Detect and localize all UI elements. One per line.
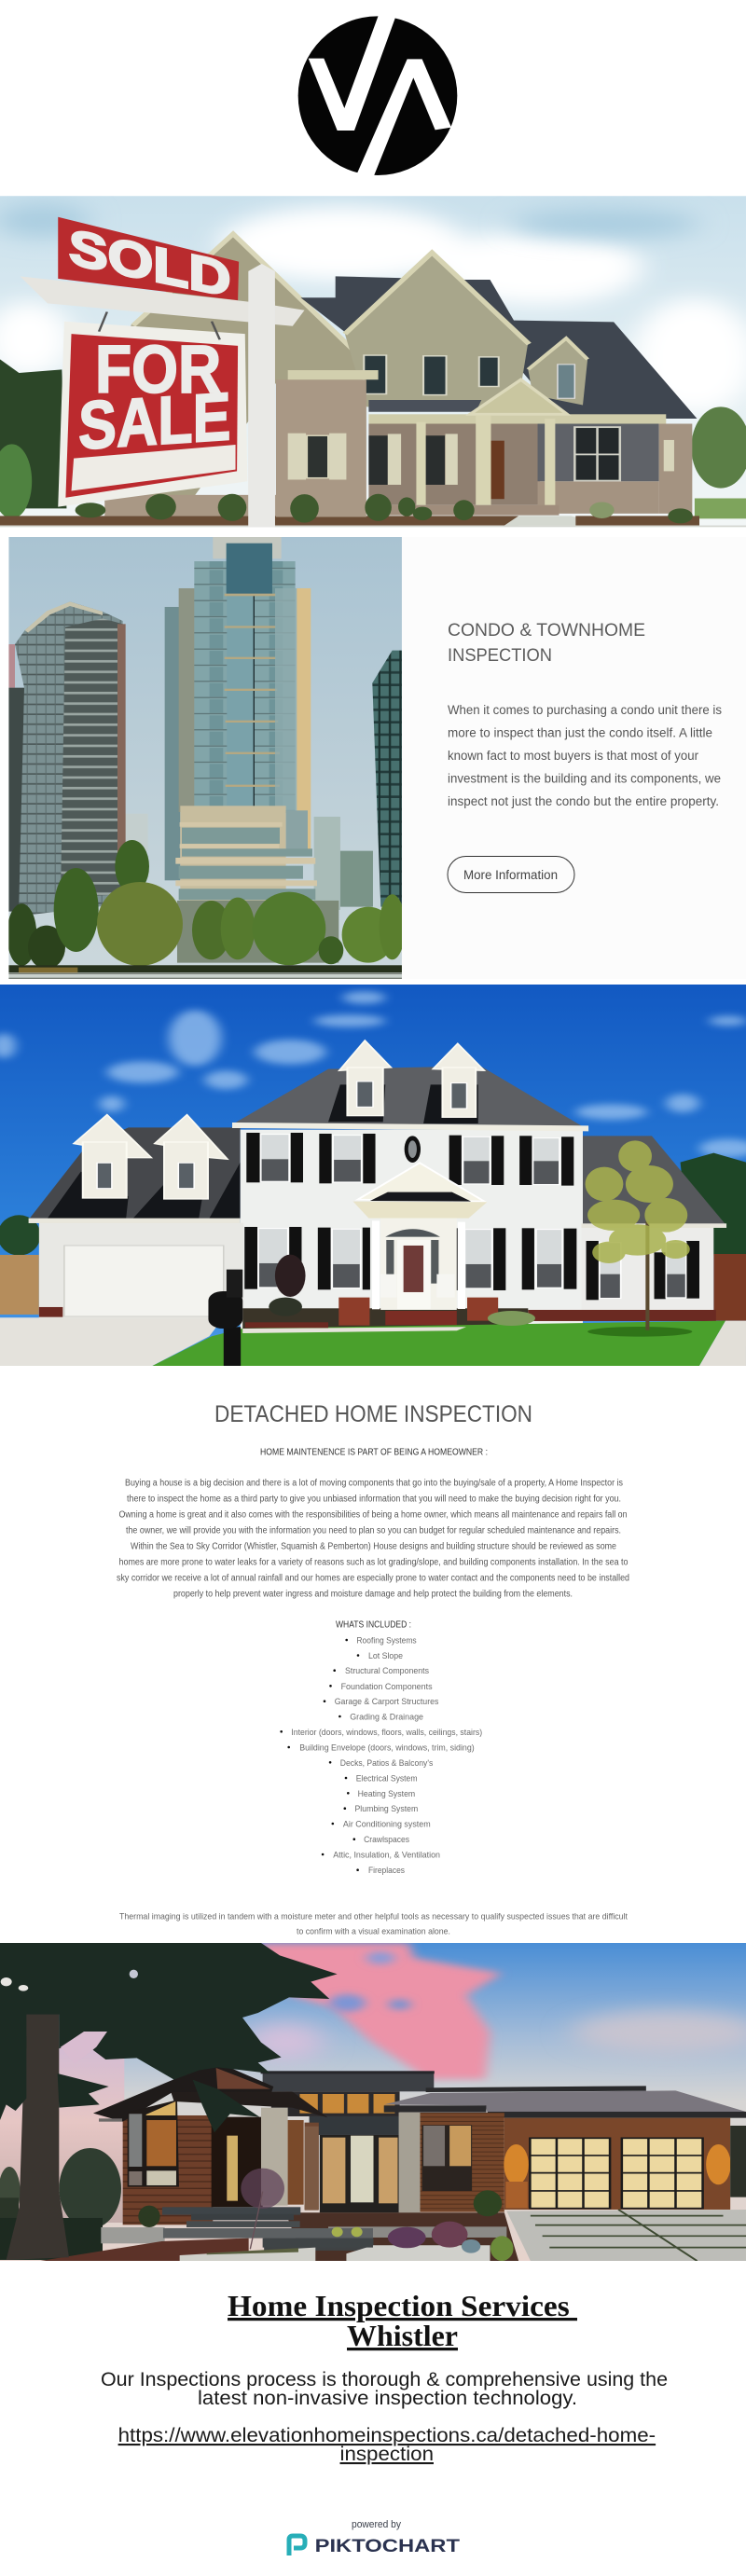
list: whats included items: Grading & Drainage [350,1712,423,1723]
heading: condo and townhome: CONDO & TOWNHOME [448,621,645,641]
text: detached home description: Buying a house is a big decision and there is a lot of moving components that go into the buying/sale of a property, A Home Inspector is [125,1479,623,1488]
list: whats included items: Plumbing System [354,1804,418,1814]
list: whats included items: Garage & Carport Structures [335,1697,439,1707]
heading: detached home inspection: DETACHED HOME INSPECTION [214,1401,532,1427]
photo: house with sold sign [0,196,746,527]
text: condo description: When it comes to purchasing a condo unit there is [448,703,722,717]
text: inspections process: latest non-invasive inspection technology. [198,2388,577,2409]
footer: powered by piktochart: powered by [352,2519,401,2530]
text: condo description: more to inspect than just the condo itself. A little [448,725,712,740]
heading: home inspection services whistler: Home Inspection Services [228,2289,577,2322]
sign: sold and for sale: SOLD [69,219,230,308]
list: whats included items: Interior (doors, windows, floors, walls, ceilings, stairs) [291,1728,482,1738]
text: detached home description: Owning a home is great and it also comes with the responsibilities of being a home owner, which means all maintenance and repairs fall on [119,1510,627,1520]
photo: condo towers [7,537,406,979]
link: website url: https://www.elevationhomeinspections.ca/detached-home- [118,2425,656,2446]
list: whats included items: Crawlspaces [364,1835,409,1845]
tree and left side of house [0,1943,373,2261]
sign: sold and for sale: SALE [78,379,230,463]
text: detached home description [117,1479,629,1600]
dormers [74,1040,484,1199]
trunk [7,2014,69,2260]
subheading: whats included: WHATS INCLUDED : [336,1620,411,1630]
sign: sold and for sale [20,217,305,527]
text: thermal imaging note: to confirm with a visual examination alone. [297,1926,450,1937]
canopy [0,1943,338,2132]
photo: modern home at sunset [0,1943,746,2261]
list: whats included items: Electrical System [356,1773,418,1784]
text: condo description [448,703,722,808]
icon: piktochart mark [289,2536,305,2555]
list: whats included items: Foundation Components [341,1682,433,1692]
link: website url: inspection [339,2444,434,2465]
trees [7,840,406,969]
heading: condo and townhome: INSPECTION [448,646,552,666]
list: whats included items: Lot Slope [368,1651,403,1661]
text: thermal imaging note: Thermal imaging is utilized in tandem with a moisture meter and other helpful tools as necessary to qualify suspected issues that are difficult [119,1911,628,1922]
text: detached home description: Within the Sea to Sky Corridor (Whistler, Squamish & Pemberton) House designs and building structure should be reviewed as some [131,1542,616,1551]
text: detached home description: homes are more prone to water leaks for a variety of reasons such as lot grading/slope, and building components installation. In the sea to [119,1557,629,1568]
list: whats included items: Fireplaces [368,1866,405,1876]
sign: sold and for sale: FOR [95,331,221,407]
shutters and windows [244,1133,699,1300]
panel: condo and townhome inspection [7,537,746,979]
list: whats included items: Heating System [358,1789,415,1799]
list: whats included items: Decks, Patios & Balcony's [340,1758,434,1769]
section: detached home inspection [117,1401,629,1937]
list: whats included items: Structural Components [345,1666,429,1676]
list: whats included items: Roofing Systems [356,1635,417,1646]
button: more information: More Information [463,868,558,882]
list: whats included items: Building Envelope (doors, windows, trim, siding) [299,1743,475,1753]
text: detached home description: there to inspect the home as a third party to give you unbiased information that you will need to make the buying decision right for you. [127,1494,621,1505]
text: detached home description: sky corridor we receive a lot of annual rainfall and our homes are especially prone to water contact and the components need to be installed [117,1574,629,1583]
text: condo description: investment is the building and its components, we [448,772,721,785]
text: condo description: known fact to most buyers is that most of your [448,749,698,763]
heading: home inspection services whistler: Whistler [347,2319,458,2352]
sky and right side of house [0,1943,746,2261]
footer: powered by piktochart: PIKTOCHART [315,2536,460,2556]
heading: condo and townhome [448,621,645,666]
text: inspections process [101,2369,668,2409]
link: website url [118,2425,656,2465]
subheading: home maintenence: HOME MAINTENENCE IS PART OF BEING A HOMEOWNER : [260,1447,488,1458]
portico [338,1163,498,1326]
photo: white colonial house [0,985,746,1366]
list: whats included items: Attic, Insulation, & Ventilation [333,1850,440,1861]
text: detached home description: properly to help prevent water ingress and moisture damage and help protect the building from the elements. [173,1589,573,1600]
text: inspections process: Our Inspections process is thorough & comprehensive using the [101,2369,668,2390]
text: thermal imaging note [119,1911,628,1937]
button: more information [448,856,574,893]
text: condo description: inspect not just the condo but the entire property. [448,794,719,808]
list: whats included items: Air Conditioning system [343,1820,431,1829]
text: detached home description: the owner, we will provide you with the information you need to plan so you can budget for regular scheduled maintenance and repairs. [126,1525,621,1536]
icon: company logo [298,15,457,176]
heading: home inspection services whistler [228,2289,577,2352]
footer: powered by piktochart [289,2519,460,2556]
list: whats included items [280,1635,482,1876]
landscaping [0,1140,746,1366]
